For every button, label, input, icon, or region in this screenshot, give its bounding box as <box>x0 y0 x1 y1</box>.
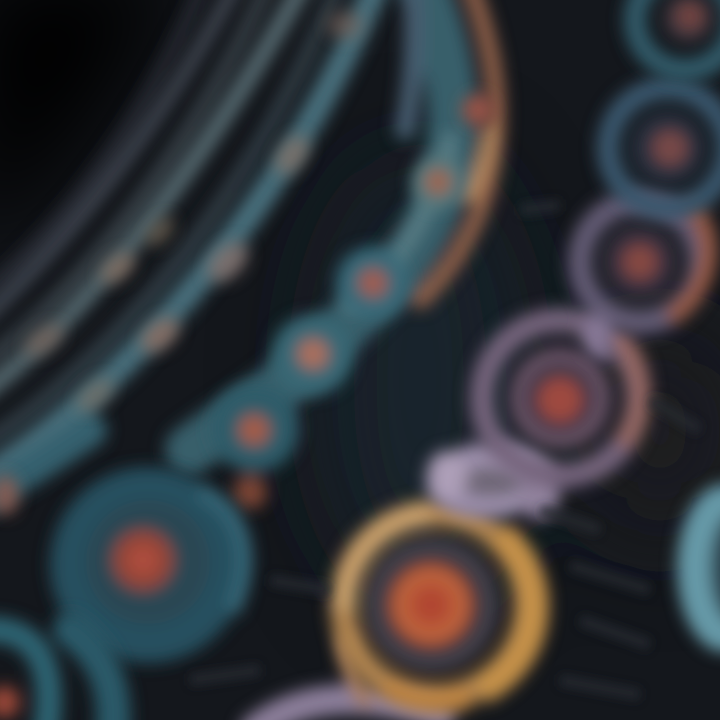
outer thin strands <box>0 0 378 500</box>
main teal strand <box>190 0 496 450</box>
teal cell left <box>50 467 246 663</box>
lavender ring with red centre <box>482 320 640 476</box>
purple ring with orange edge <box>580 202 708 346</box>
teal ring top-right <box>635 0 720 70</box>
strand beads: thin strands <box>0 11 363 515</box>
blue ring <box>608 88 720 208</box>
lavender bottom strand <box>255 640 440 720</box>
orange gear ring <box>343 513 534 701</box>
teal cell right edge <box>677 484 720 652</box>
teal strand bottom-left <box>0 629 113 720</box>
lavender cluster <box>423 437 560 523</box>
strand cells with red centres <box>211 94 494 509</box>
faint dark-field marks <box>190 205 700 695</box>
